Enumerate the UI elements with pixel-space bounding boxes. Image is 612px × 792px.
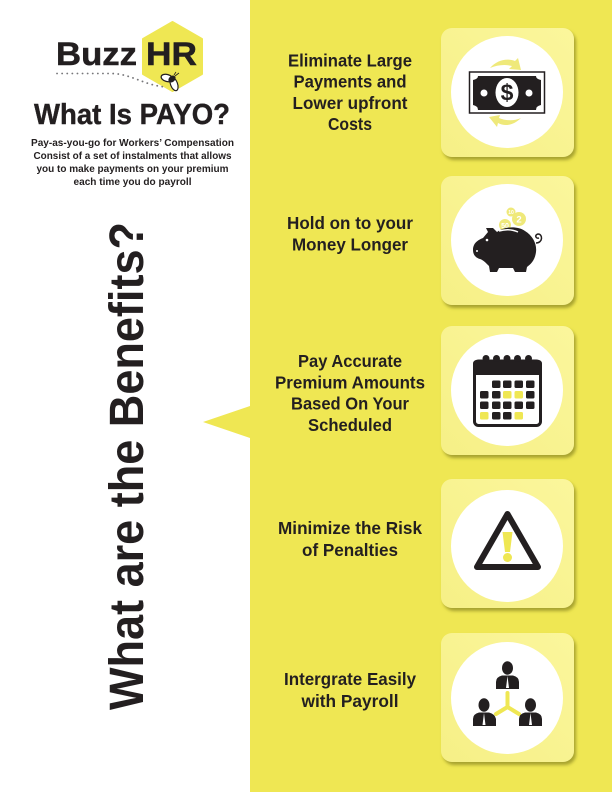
benefit 1 text <box>288 50 412 134</box>
benefit 4 text: of Penalties <box>302 540 398 560</box>
icon: calendar <box>473 355 542 426</box>
benefit 3 text: Based On Your <box>291 394 409 414</box>
benefit 3 text: Scheduled <box>308 415 392 435</box>
arrow pointer <box>203 406 250 438</box>
benefit 1 text: Costs <box>328 114 372 134</box>
benefit 4 text <box>278 518 422 560</box>
icon: warning triangle <box>477 514 538 567</box>
benefit 1 text: Lower upfront <box>292 93 408 113</box>
benefit 2 text <box>287 213 413 254</box>
logo dotted flight path <box>57 74 167 87</box>
logo wordmark <box>56 36 197 72</box>
benefit 5 text: with Payroll <box>301 691 398 711</box>
benefit 1 <box>288 28 574 157</box>
benefit 4 <box>278 479 574 608</box>
benefit 3 text: Premium Amounts <box>275 372 425 392</box>
circle 5 <box>451 642 563 754</box>
benefit 3 <box>275 326 574 455</box>
circle 2 <box>451 184 563 296</box>
icon: connected people <box>473 661 542 726</box>
card 4 <box>441 479 574 608</box>
benefit 2 <box>287 176 574 305</box>
logo wordmark: HR <box>146 36 197 72</box>
vertical heading: What are the Benefits? <box>101 222 154 710</box>
benefit 1 text: Payments and <box>294 72 406 92</box>
icon: piggy bank with coins: 2 <box>516 214 522 226</box>
logo wordmark: Buzz <box>56 36 137 72</box>
benefit 2 text: Hold on to your <box>287 213 413 233</box>
panel: yellow background <box>250 0 612 792</box>
card 2 <box>441 176 574 305</box>
circle 4 <box>451 490 563 602</box>
benefit 5 <box>284 633 574 762</box>
intro text: Consist of a set of instalments that allows <box>34 150 232 162</box>
benefit 4 text: Minimize the Risk <box>278 518 422 538</box>
icon: banknote with arrows <box>470 58 544 127</box>
icon: banknote with arrows: $ <box>501 80 514 106</box>
icon: piggy bank with coins: 50 <box>501 223 509 230</box>
logo hexagon <box>143 22 202 91</box>
benefit 3 text <box>275 351 425 435</box>
icon: piggy bank with coins <box>473 208 542 272</box>
circle 3 <box>451 334 563 446</box>
benefit 5 text <box>284 669 416 711</box>
intro text: Pay-as-you-go for Workers’ Compensation <box>31 137 234 149</box>
circle 1 <box>451 36 563 148</box>
intro text <box>31 137 234 188</box>
benefit 3 text: Pay Accurate <box>298 351 402 371</box>
card 5 <box>441 633 574 762</box>
card 3 <box>441 326 574 455</box>
intro text: each time you do payroll <box>74 176 192 188</box>
title: What Is PAYO? <box>34 99 230 131</box>
icon: piggy bank with coins: 10 <box>508 210 514 216</box>
benefit 2 text: Money Longer <box>292 234 408 254</box>
benefit 5 text: Intergrate Easily <box>284 669 416 689</box>
card 1 <box>441 28 574 157</box>
intro text: you to make payments on your premium <box>36 163 228 175</box>
logo: BuzzHR <box>56 22 202 92</box>
logo bee <box>160 72 180 92</box>
benefit 1 text: Eliminate Large <box>288 50 412 70</box>
